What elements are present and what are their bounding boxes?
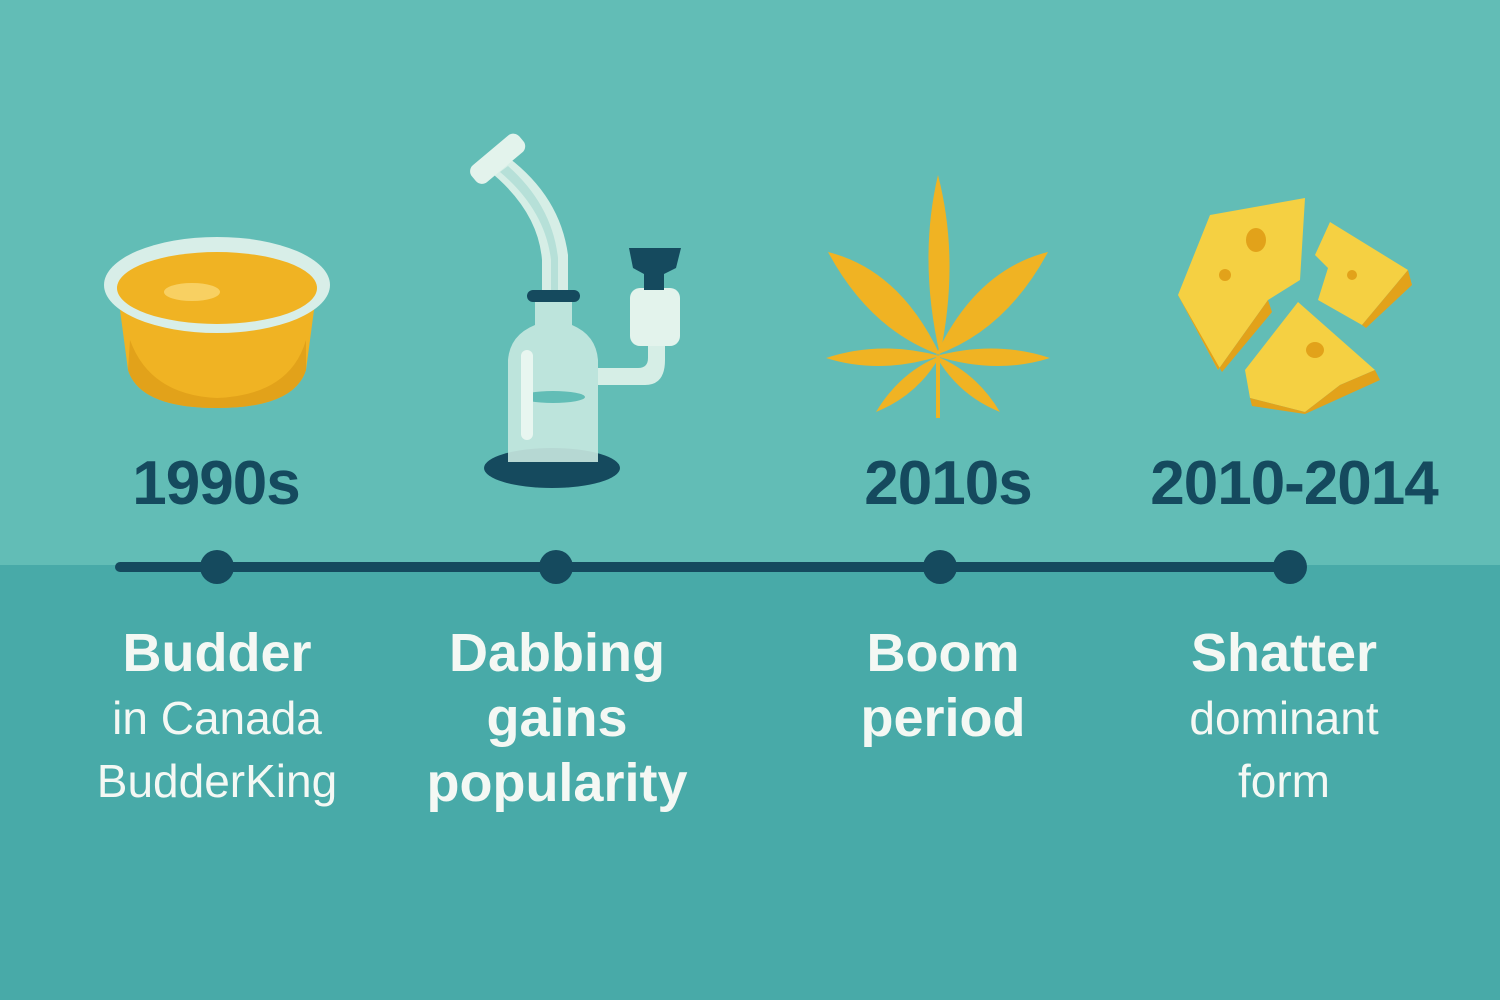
icon: shatter pieces: [1178, 198, 1412, 414]
label: Boom: period: [860, 688, 1026, 748]
label: Shatter: [1189, 623, 1379, 807]
label: Budder: in Canada: [112, 692, 322, 744]
label: Shatter: form: [1238, 755, 1330, 807]
icon: cannabis leaf: [826, 175, 1050, 418]
label: Budder: Budder: [122, 623, 312, 683]
label: Shatter: Shatter: [1191, 623, 1377, 683]
label: Boom: Boom: [867, 623, 1019, 683]
label: Shatter: dominant: [1189, 692, 1379, 744]
year: 1990s: 1990s: [132, 449, 300, 518]
label: Dabbing: popularity: [426, 753, 688, 813]
label: Dabbing: Dabbing: [449, 623, 665, 683]
label: Budder: [97, 623, 337, 807]
label: Dabbing: [426, 623, 688, 813]
label: Budder: BudderKing: [97, 755, 337, 807]
year: 2010-2014: 2010-2014: [1150, 449, 1438, 518]
icon: budder jar: [104, 237, 330, 408]
label: Boom: [860, 623, 1026, 748]
year: 2010s: 2010s: [864, 449, 1032, 518]
label: Dabbing: gains: [486, 688, 628, 748]
icon: dab rig: [467, 130, 681, 488]
timeline: [120, 550, 1307, 584]
